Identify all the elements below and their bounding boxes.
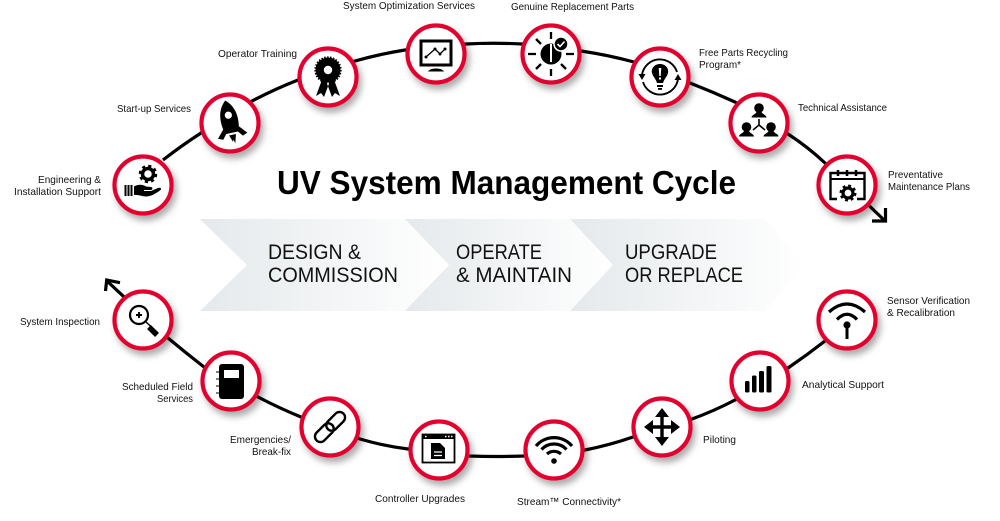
icon: recycling arrows and bulb	[638, 59, 682, 95]
icon: award ribbon	[315, 57, 341, 97]
label: emergencies and break-fix: Emergencies/	[230, 434, 291, 446]
title: UV System Management Cycle	[277, 164, 736, 201]
label: genuine replacement parts: Genuine Replacement Parts	[511, 1, 634, 13]
icon: notebook	[216, 364, 244, 399]
node: piloting	[634, 398, 690, 456]
icon: four-way arrow	[644, 408, 680, 446]
chevron: design and commission: DESIGN &	[268, 241, 361, 264]
label: system optimization services: System Optimization Services	[343, 0, 475, 12]
label: free parts recycling program: Program*	[699, 59, 741, 71]
node: preventative maintenance plans	[818, 156, 876, 214]
node: operator training	[300, 48, 356, 106]
label: stream connectivity: Stream™ Connectivity*	[517, 496, 621, 508]
icon: document window	[422, 434, 455, 462]
label: sensor verification and recalibration: Sensor Verification	[887, 295, 970, 307]
chevron: operate and maintain: OPERATE	[456, 241, 542, 264]
cycle path: bottom arc with arrow	[106, 280, 847, 456]
node: genuine replacement parts	[522, 26, 580, 82]
label: preventative maintenance plans	[888, 169, 970, 193]
chevron: upgrade or replace: UPGRADE	[625, 241, 717, 264]
label: free parts recycling program: Free Parts Recycling	[699, 47, 788, 59]
icon: chain link	[313, 410, 347, 444]
icon: rocket	[211, 97, 249, 147]
label: piloting: Piloting	[703, 434, 736, 446]
label: preventative maintenance plans: Preventative	[888, 169, 943, 181]
label: system inspection: System Inspection	[20, 316, 100, 328]
icon: magnifying glass	[130, 306, 158, 335]
node: analytical support	[732, 352, 788, 410]
label: sensor verification and recalibration	[887, 295, 970, 319]
label: technical assistance: Technical Assistance	[798, 102, 887, 114]
chevron: upgrade or replace: OR REPLACE	[625, 264, 743, 287]
label: engineering and installation support: Installation Support	[14, 186, 101, 198]
node: system optimization services	[408, 26, 464, 82]
label: engineering and installation support: Engineering &	[38, 174, 101, 186]
icon: antenna signal	[829, 304, 865, 339]
label: operator training: Operator Training	[218, 48, 297, 60]
node: controller upgrades	[410, 422, 468, 478]
label: emergencies and break-fix: Break-fix	[252, 446, 292, 458]
node: emergencies and break-fix	[302, 398, 358, 456]
chevron: upgrade or replace	[570, 219, 805, 311]
chevron: design and commission	[200, 219, 449, 311]
node: sensor verification and recalibration	[818, 292, 876, 348]
cycle path: top arc with arrow	[163, 43, 886, 221]
chevron: design and commission: COMMISSION	[268, 264, 398, 287]
label: scheduled field services: Scheduled Field	[122, 381, 193, 393]
icon: signal bars	[745, 366, 772, 392]
node: free parts recycling program	[632, 48, 688, 106]
label: controller upgrades: Controller Upgrades	[375, 493, 465, 505]
node: scheduled field services	[202, 352, 260, 410]
icon: light burst with check badge	[528, 32, 574, 76]
node: start-up services	[202, 94, 258, 152]
label: emergencies and break-fix	[230, 434, 292, 458]
chevron: operate and maintain	[405, 219, 613, 311]
node: technical assistance	[730, 94, 788, 152]
icon: three connected people	[739, 103, 778, 136]
node: engineering and installation support	[114, 156, 172, 214]
icon: wifi	[536, 438, 572, 464]
node: system inspection	[114, 292, 172, 348]
label: analytical support: Analytical Support	[802, 379, 884, 391]
label: engineering and installation support	[14, 174, 101, 198]
label: scheduled field services	[122, 381, 193, 405]
label: start-up services: Start-up Services	[117, 103, 191, 115]
node: stream connectivity	[526, 422, 582, 478]
icon: monitor with line chart	[421, 41, 451, 72]
chevron: operate and maintain: & MAINTAIN	[456, 264, 572, 287]
label: preventative maintenance plans: Maintenance Plans	[888, 181, 970, 193]
icon: calendar with gear	[830, 170, 865, 200]
label: scheduled field services: Services	[157, 393, 193, 405]
label: sensor verification and recalibration: & Recalibration	[887, 307, 955, 319]
icon: hand holding gear	[124, 166, 161, 196]
label: free parts recycling program	[699, 47, 788, 71]
